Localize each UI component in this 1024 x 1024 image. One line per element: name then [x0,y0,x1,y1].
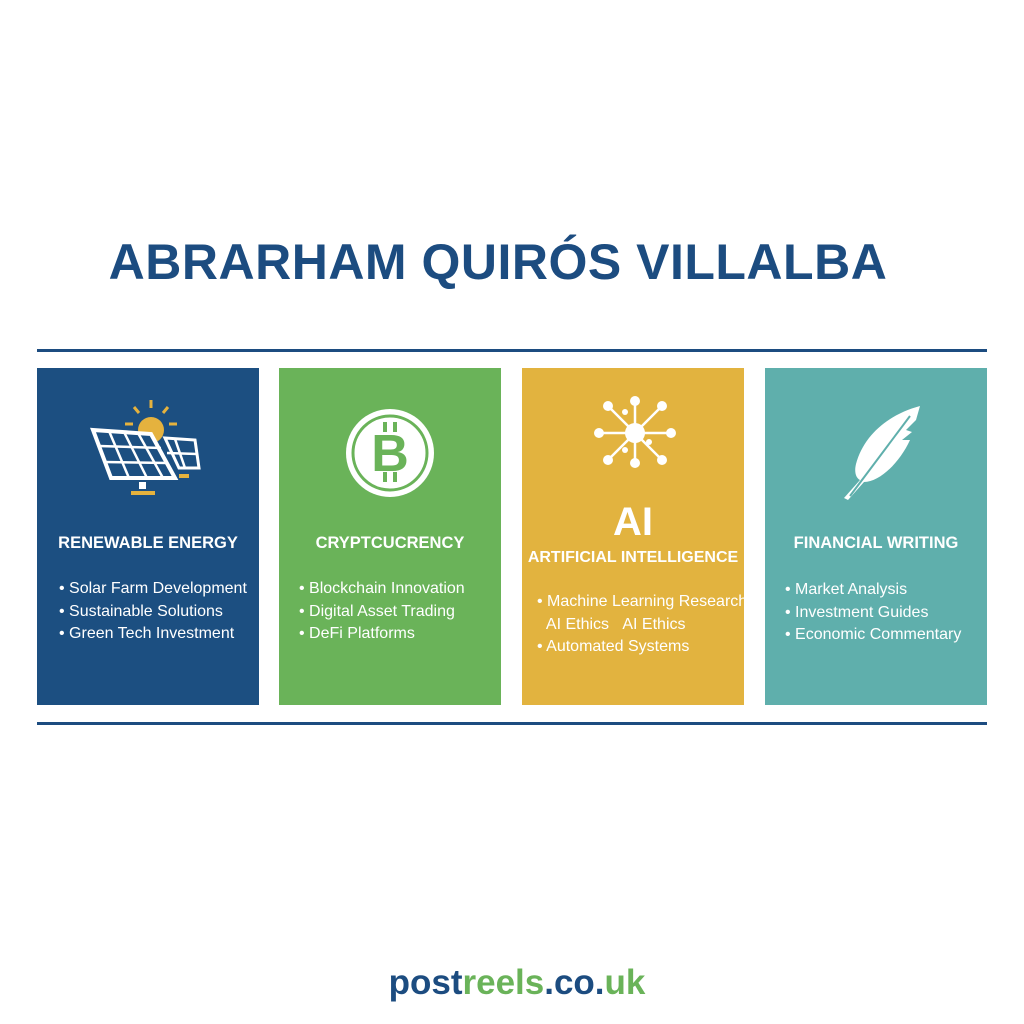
bullets: • Solar Farm Development [59,580,247,597]
bullets [59,580,247,642]
bullets: • Automated Systems [537,638,689,655]
bullets: • Machine Learning Research [537,593,747,610]
bullets: • Market Analysis [785,581,907,598]
icon: bitcoin: B [371,425,409,483]
panel: financial writing [765,368,987,705]
bullets: • Green Tech Investment [59,625,234,642]
heading: financial writing: FINANCIAL WRITING [794,534,958,552]
heading: artificial intelligence: ARTIFICIAL INTELLIGENCE [528,549,738,566]
icon: solar panel [90,400,201,495]
footer: website: postreels.co.uk [389,963,645,1002]
bullets: • Blockchain Innovation [299,580,465,597]
bullets: • DeFi Platforms [299,625,415,642]
bullets [785,581,962,643]
bullets: • Investment Guides [785,604,928,620]
panel: renewable energy [37,368,259,705]
icon: feather [844,406,920,500]
heading: AI: AI [613,500,653,544]
heading: renewable energy: RENEWABLE ENERGY [58,534,238,552]
panel: AI [522,368,744,705]
bullets: • Sustainable Solutions [59,602,223,620]
panel: cryptocurrency [279,368,501,705]
bullets: • Digital Asset Trading [299,602,455,620]
bullets [299,580,465,642]
icon: bitcoin [346,409,434,497]
bullets: • Economic Commentary [785,626,961,643]
heading: cryptocurrency: CRYPTCUCRENCY [316,534,464,552]
icon: neural network [594,396,676,468]
bullets [537,593,747,655]
title: ABRARHAM QUIRÓS VILLALBA [109,234,887,290]
bullets: AI Ethics AI Ethics [546,616,686,632]
